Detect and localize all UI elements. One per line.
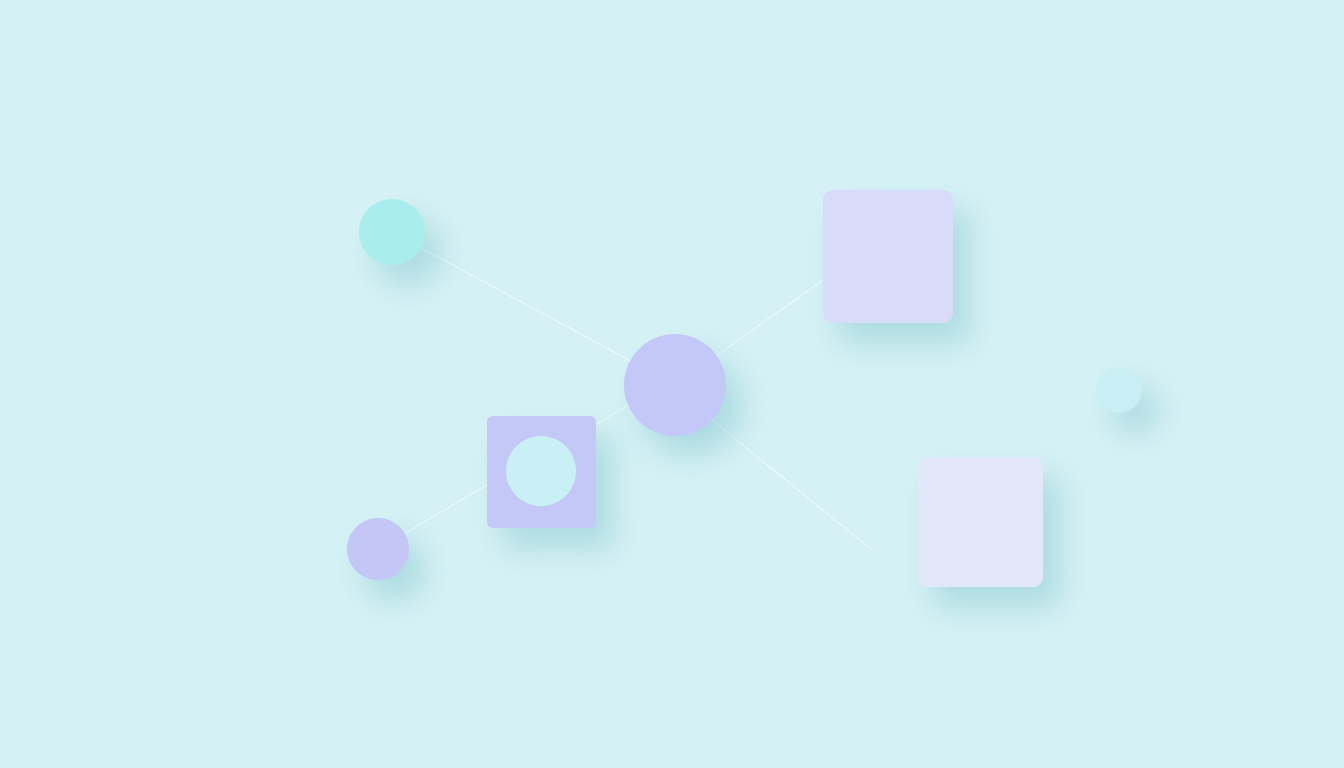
node: teal circle top-left	[359, 199, 425, 265]
node: small right circle	[1096, 367, 1142, 413]
node: top-right square	[823, 190, 953, 323]
node: small bottom-left circle	[347, 518, 409, 580]
inner circle	[506, 436, 576, 506]
node: bottom-right square	[918, 457, 1043, 587]
node: middle square with inner circle	[487, 416, 596, 528]
node: central lavender circle	[624, 334, 726, 436]
